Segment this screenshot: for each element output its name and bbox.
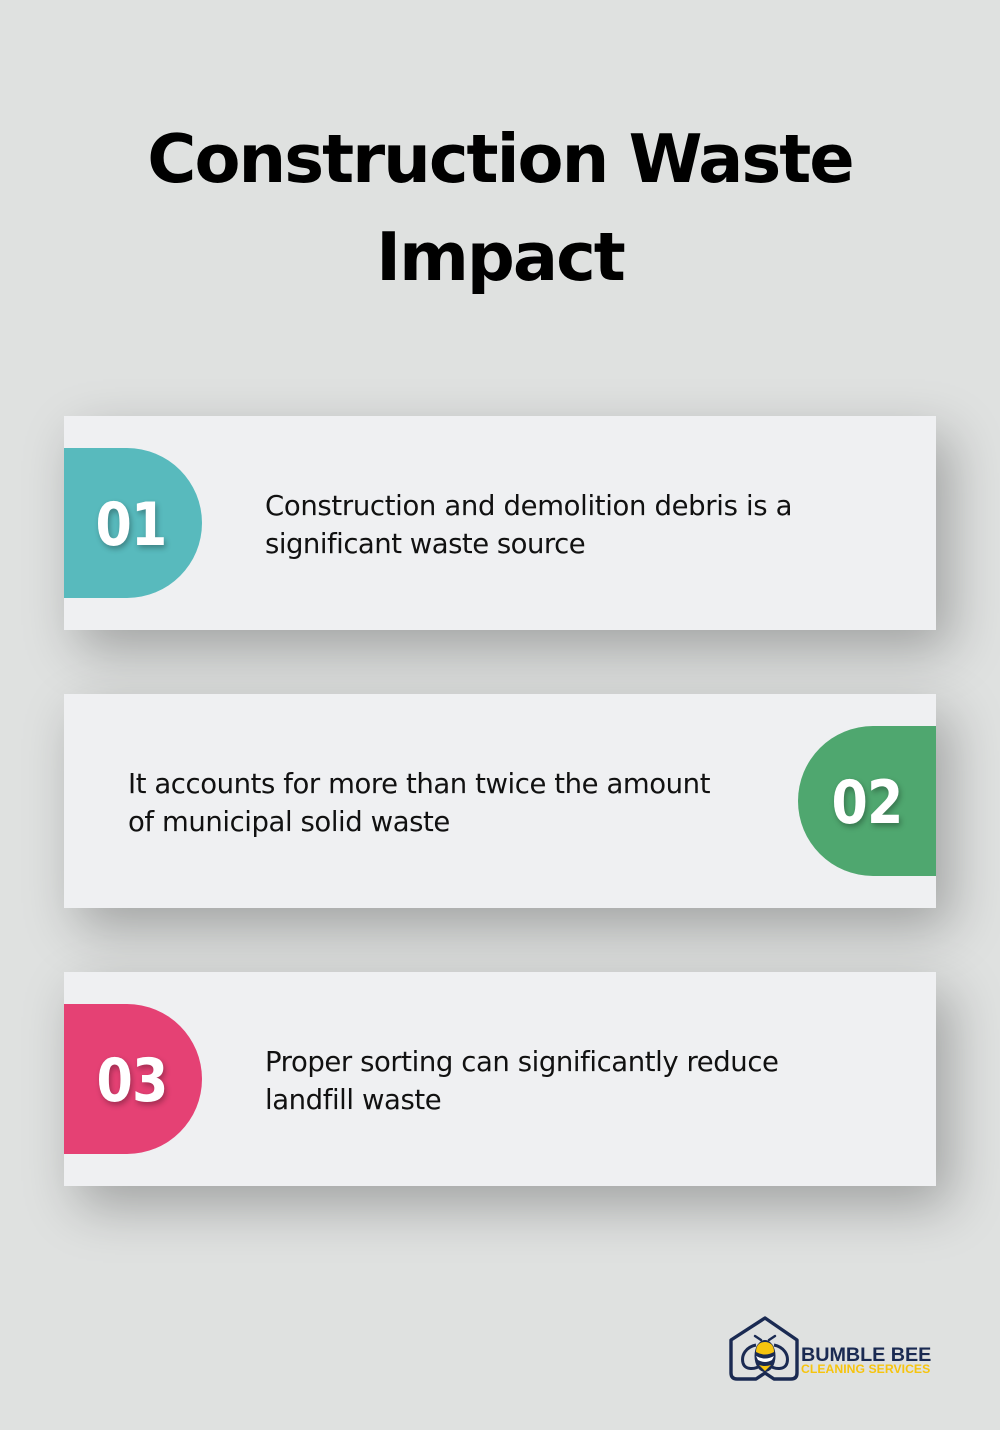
text 03	[265, 1046, 779, 1116]
panel: item 02	[64, 694, 936, 908]
panel: item 01	[64, 416, 936, 630]
badge 03	[64, 1004, 202, 1154]
text 03: landfill waste	[265, 1084, 441, 1116]
panel: item 03	[64, 972, 936, 1186]
text 03: Proper sorting can significantly reduce	[265, 1046, 779, 1078]
text 02	[128, 768, 710, 838]
badge 03: 03	[97, 1046, 167, 1116]
badge 02: 02	[832, 768, 902, 838]
title: Impact	[376, 218, 624, 296]
badge 01	[64, 448, 202, 598]
title: Construction Waste	[147, 120, 853, 198]
badge 01: 01	[96, 490, 166, 560]
text 02: of municipal solid waste	[128, 806, 450, 838]
logo wordmark: BUMBLE BEE	[801, 1344, 931, 1366]
text 02: It accounts for more than twice the amount	[128, 768, 710, 800]
text 01: significant waste source	[265, 528, 585, 560]
badge 02	[798, 726, 936, 876]
title	[147, 120, 853, 296]
icon: house with bee	[729, 1316, 799, 1381]
text 01: Construction and demolition debris is a	[265, 490, 792, 522]
logo: Bumble Bee Cleaning Services	[729, 1316, 931, 1381]
text 01	[265, 490, 792, 560]
logo tagline: CLEANING SERVICES	[801, 1362, 930, 1376]
